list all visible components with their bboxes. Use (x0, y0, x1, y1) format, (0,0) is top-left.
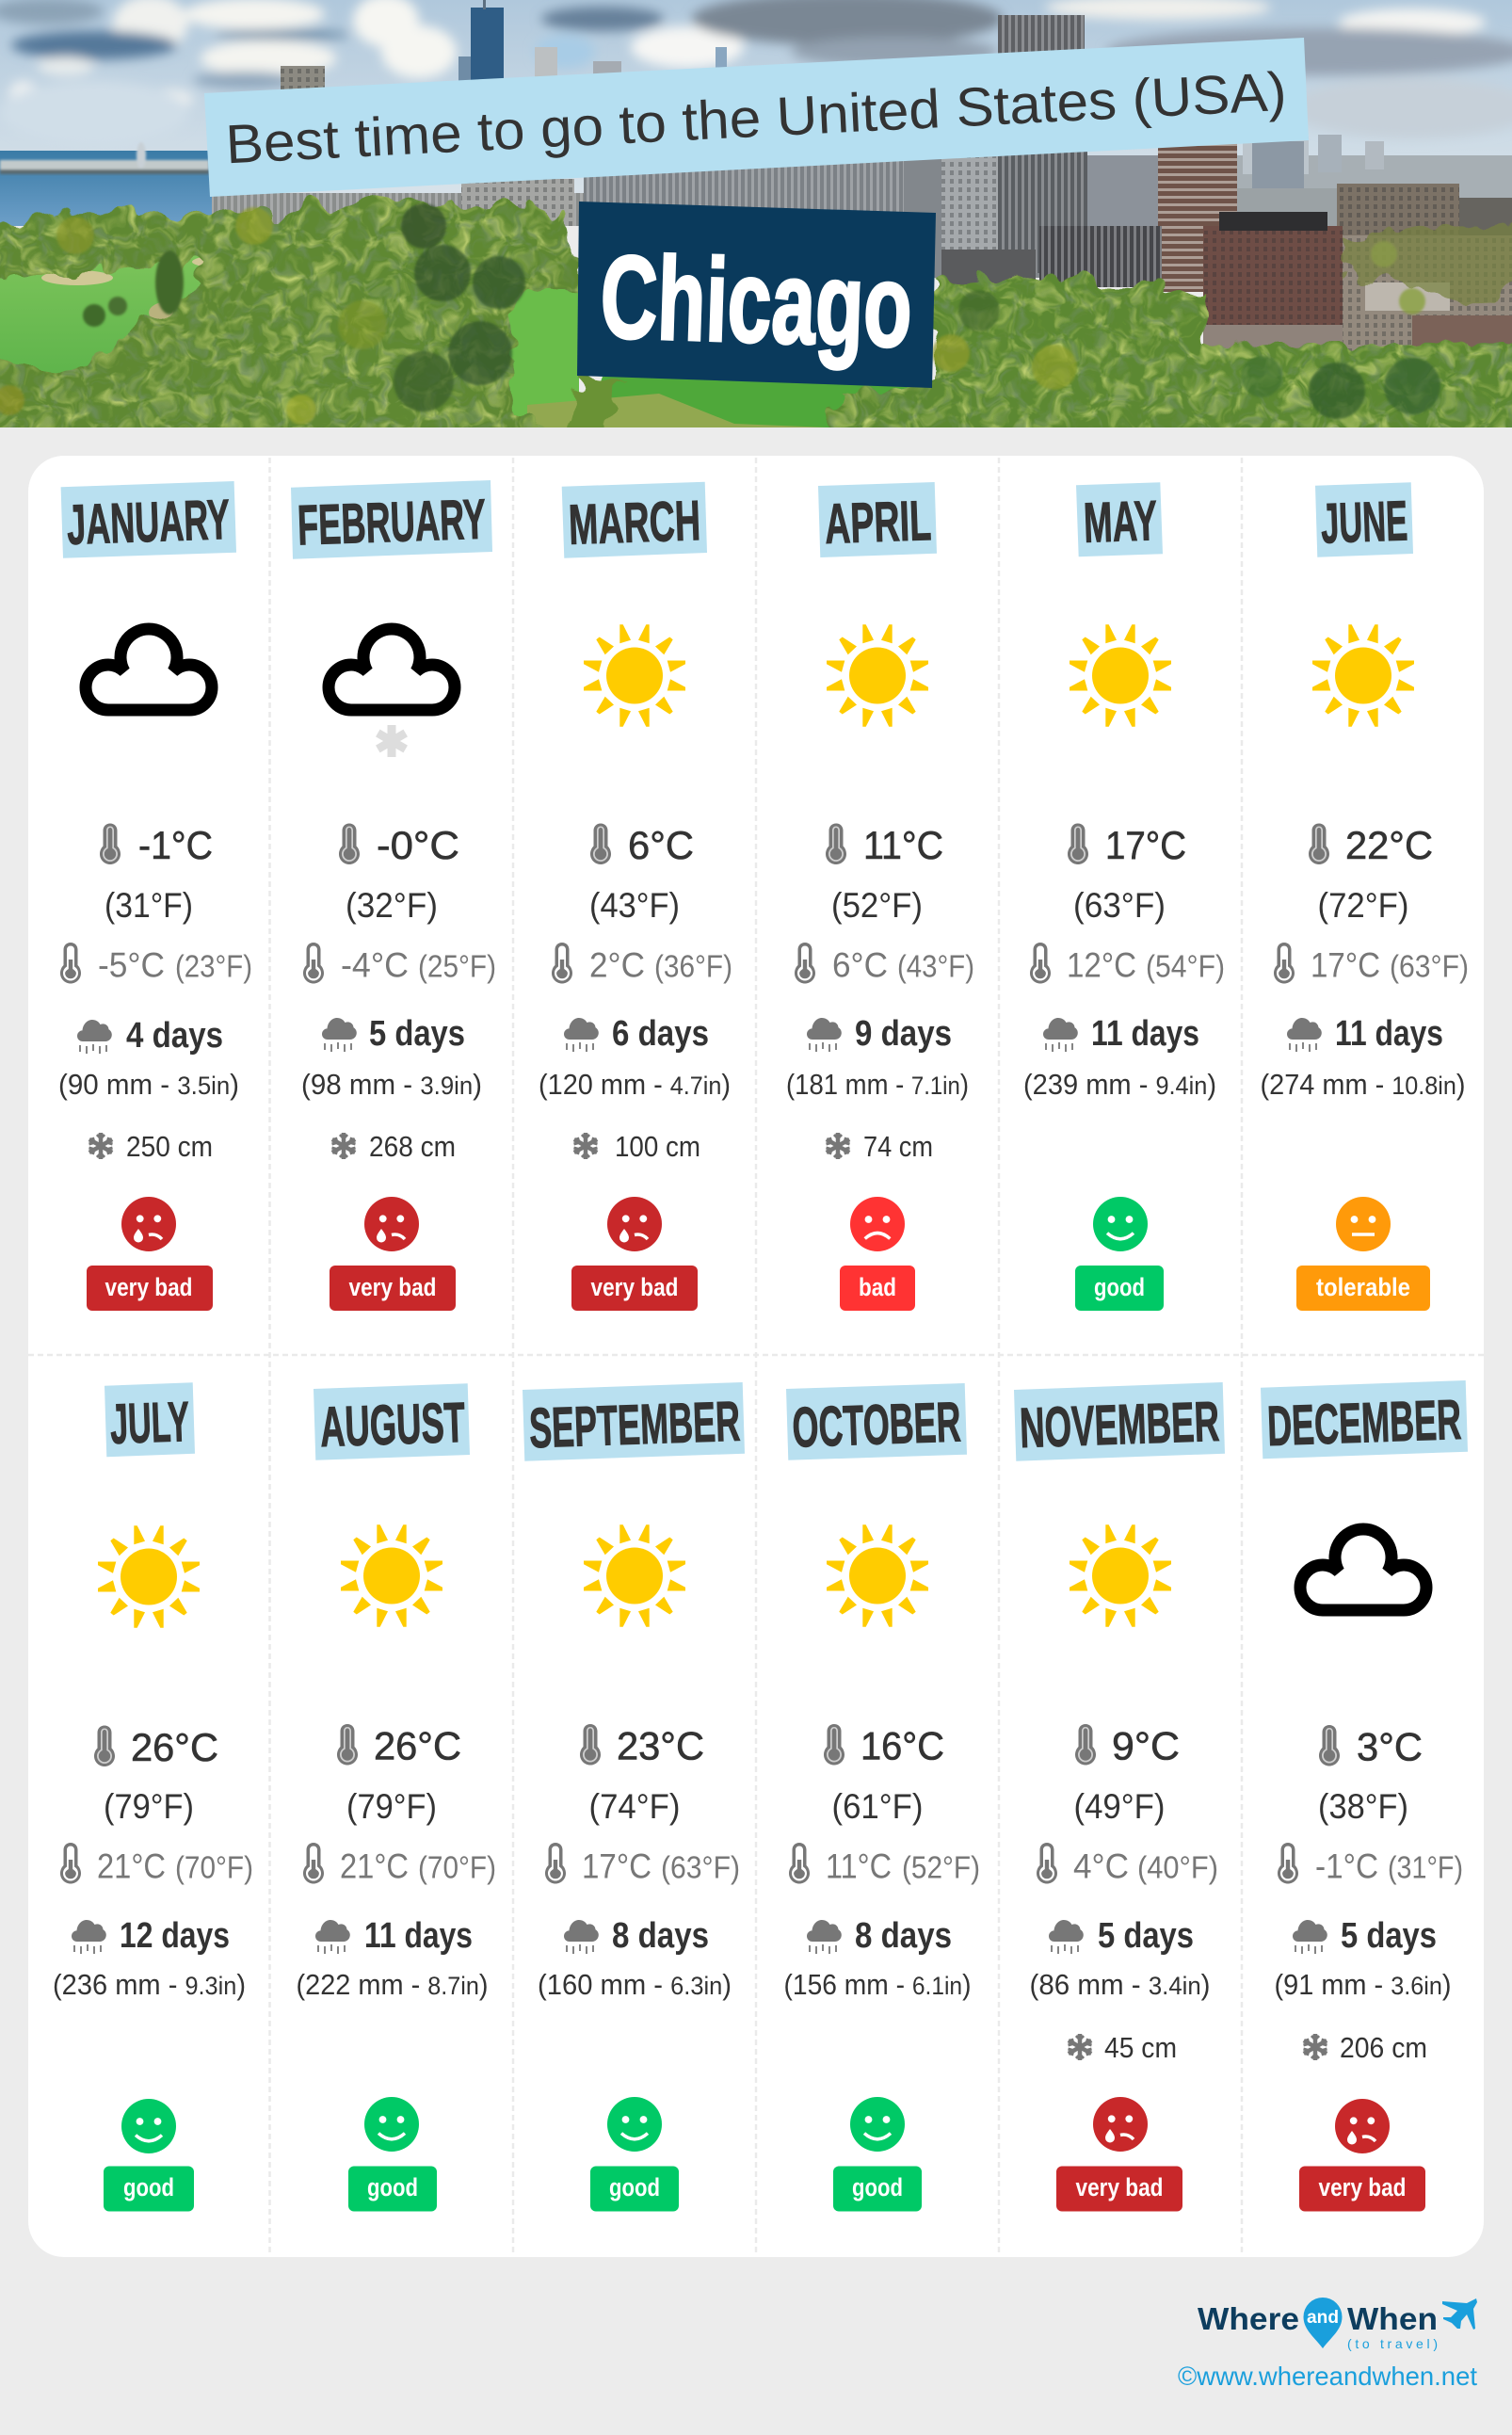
rainy days (72, 1916, 230, 1956)
high fahrenheit: (63°F) (1073, 886, 1166, 925)
rating badge (840, 1266, 915, 1311)
high temperature: -1°C (138, 823, 213, 867)
snowfall (331, 1130, 456, 1163)
month label: JULY (109, 1390, 190, 1456)
high fahrenheit: (31°F) (105, 886, 193, 925)
rating badge: bad (859, 1273, 896, 1301)
high fahrenheit: (74°F) (589, 1787, 680, 1826)
rating badge (1299, 2166, 1425, 2211)
month label (786, 1383, 967, 1460)
snowfall (827, 1130, 933, 1163)
precipitation: (120 mm - 4.7in) (539, 1068, 731, 1101)
low temperature: -1°C (1315, 1847, 1378, 1885)
tree masses (0, 198, 1512, 443)
icon: cloud with snow (329, 629, 455, 757)
precipitation: (90 mm - 3.5in) (58, 1068, 239, 1101)
rating badge: very bad (1318, 2173, 1407, 2201)
residential streets (1343, 235, 1512, 351)
rating face (364, 1197, 419, 1251)
logo: Where and When to travel (1198, 2298, 1477, 2351)
low temperature (1037, 1843, 1218, 1885)
rating face (1093, 2097, 1148, 2152)
rainy days: 11 days (1091, 1014, 1199, 1054)
month label: AUGUST (319, 1391, 466, 1459)
rainy days: 9 days (855, 1014, 952, 1054)
rainy days (1287, 1014, 1443, 1054)
icon: sun (827, 1524, 928, 1627)
low temperature (60, 1843, 253, 1885)
rating badge: tolerable (1316, 1273, 1410, 1301)
rainy days (322, 1014, 465, 1054)
brick building (1203, 226, 1343, 325)
icon: airplane (1442, 2298, 1477, 2330)
high temperature: 6°C (628, 823, 694, 867)
high fahrenheit: (32°F) (346, 886, 438, 925)
icon: sun (1070, 624, 1171, 727)
low temperature: 21°C (340, 1847, 409, 1885)
rating badge (104, 2166, 194, 2211)
month label (523, 1382, 745, 1461)
month label (562, 482, 707, 558)
low temperature (545, 1843, 740, 1885)
rainy days (1293, 1916, 1437, 1956)
rainy days (77, 1016, 223, 1056)
precipitation: (98 mm - 3.9in) (301, 1068, 482, 1101)
rating badge: very bad (591, 1273, 678, 1301)
rainy days: 6 days (612, 1014, 709, 1054)
high temperature: 16°C (861, 1723, 944, 1768)
rating badge: very bad (1075, 2173, 1164, 2201)
snowfall (1303, 2031, 1427, 2064)
icon: sun (98, 1525, 200, 1628)
icon: cloud (86, 629, 212, 710)
low temperature: 4°C (1073, 1847, 1129, 1885)
month label: SEPTEMBER (528, 1390, 741, 1459)
icon: cloud (1300, 1529, 1426, 1610)
low temperature: 12°C (1067, 945, 1136, 985)
high fahrenheit: (72°F) (1318, 886, 1408, 925)
low temperature: (63°F) (661, 1849, 740, 1885)
rating badge (330, 1266, 456, 1311)
towers above the title band (471, 8, 504, 83)
rating badge (87, 1266, 213, 1311)
panel: February (291, 480, 496, 1311)
month label (105, 1382, 195, 1457)
rating face (121, 1197, 176, 1251)
low temperature: -4°C (341, 945, 409, 985)
high temperature: 23°C (617, 1723, 704, 1768)
high temperature: 26°C (131, 1725, 218, 1769)
rating badge: good (123, 2173, 174, 2201)
low temperature: (52°F) (902, 1849, 980, 1885)
month label (1315, 482, 1413, 557)
precipitation: (86 mm - 3.4in) (1030, 1968, 1211, 2001)
month label: JUNE (1320, 489, 1408, 556)
panel: July (53, 1382, 253, 2211)
high temperature (100, 823, 213, 867)
low temperature (552, 943, 732, 985)
snowfall: 206 cm (1340, 2031, 1427, 2064)
snowfall: 100 cm (615, 1130, 700, 1163)
precipitation: (181 mm - 7.1in) (786, 1068, 969, 1101)
rating face (121, 2099, 176, 2153)
high temperature (1068, 823, 1186, 867)
rainy days: 5 days (1098, 1916, 1194, 1956)
low temperature: 17°C (1311, 945, 1380, 985)
high fahrenheit: (49°F) (1073, 1787, 1166, 1826)
website credit: ©www.whereandwhen.net (1178, 2362, 1477, 2391)
low temperature (1278, 1843, 1463, 1885)
low temperature (1030, 943, 1225, 985)
panel: June (1260, 482, 1469, 1311)
rating badge (348, 2166, 437, 2211)
rainy days (564, 1916, 709, 1956)
rating face (364, 2097, 419, 2152)
panel: April (786, 482, 974, 1311)
low temperature (303, 943, 496, 985)
high temperature: -0°C (377, 823, 459, 867)
panel: November (1014, 1382, 1225, 2211)
rainy days (1043, 1014, 1199, 1054)
title band: Best time to go to the United States (USA) (224, 61, 1288, 175)
month label (818, 482, 937, 557)
rainy days: 12 days (120, 1916, 230, 1956)
month label: OCTOBER (791, 1390, 962, 1459)
lake (0, 151, 226, 226)
panel: September (523, 1382, 745, 2211)
low temperature (60, 943, 252, 985)
rating badge: very bad (348, 1273, 437, 1301)
rainy days: 5 days (1341, 1916, 1437, 1956)
month label (291, 480, 492, 559)
logo: Where and When to travel: and (1307, 2308, 1339, 2328)
rainy days: 8 days (855, 1916, 952, 1956)
low temperature (789, 1843, 980, 1885)
rating face (607, 2097, 662, 2152)
low temperature: (40°F) (1137, 1849, 1218, 1885)
city name block: Chicago (599, 232, 914, 372)
low temperature: (36°F) (654, 949, 732, 983)
month label (1014, 1382, 1225, 1461)
precipitation: (274 mm - 10.8in) (1260, 1068, 1465, 1101)
mid-ground towers (212, 193, 588, 226)
logo: Where and When to travel: Where (1198, 2301, 1299, 2336)
rating badge: very bad (105, 1273, 192, 1301)
month label: MARCH (568, 489, 701, 556)
low temperature (795, 943, 974, 985)
rainy days: 8 days (612, 1916, 709, 1956)
low temperature: 17°C (582, 1847, 651, 1885)
panel: May (1023, 482, 1225, 1311)
high temperature: 17°C (1105, 823, 1186, 867)
precipitation: (91 mm - 3.6in) (1275, 1968, 1452, 2001)
rainy days (315, 1916, 473, 1956)
month label (1076, 482, 1163, 556)
high temperature (339, 823, 459, 867)
rainy days (807, 1916, 952, 1956)
low temperature: (23°F) (175, 949, 252, 983)
rainy days (807, 1014, 952, 1054)
rating badge: good (852, 2173, 903, 2201)
low temperature (1274, 943, 1469, 985)
rating face (850, 1197, 905, 1251)
month label: FEBRUARY (297, 488, 487, 556)
icon: sun (341, 1524, 442, 1627)
rating badge: good (1094, 1273, 1145, 1301)
calendar panel (28, 456, 1484, 2257)
rating badge (571, 1266, 698, 1311)
low temperature: 21°C (97, 1847, 166, 1885)
rating face (607, 1197, 662, 1251)
high fahrenheit: (79°F) (104, 1787, 194, 1826)
high temperature: 26°C (374, 1723, 461, 1768)
title band (204, 38, 1309, 197)
city name block (577, 202, 936, 388)
precipitation: (222 mm - 8.7in) (296, 1968, 488, 2001)
icon: sun (584, 624, 685, 727)
low temperature: 6°C (832, 945, 888, 985)
precipitation: (160 mm - 6.3in) (538, 1968, 732, 2001)
rainy days: 11 days (1335, 1014, 1443, 1054)
snowfall: 250 cm (126, 1130, 213, 1163)
low temperature: (63°F) (1390, 949, 1469, 983)
rating badge (1296, 1266, 1430, 1311)
low temperature (303, 1843, 496, 1885)
month label: MAY (1083, 489, 1158, 555)
high temperature (826, 823, 943, 867)
month label (61, 481, 236, 558)
panel: March (539, 482, 732, 1311)
icon: sun (584, 1524, 685, 1627)
low temperature: (25°F) (418, 949, 496, 983)
high fahrenheit: (61°F) (832, 1787, 923, 1826)
panel: October (783, 1383, 980, 2211)
icon: map pin (1303, 2298, 1343, 2348)
rating face (850, 2097, 905, 2152)
month label: JANUARY (66, 488, 231, 556)
high temperature: 22°C (1345, 823, 1433, 867)
high fahrenheit: (79°F) (346, 1787, 437, 1826)
precipitation: (156 mm - 6.1in) (783, 1968, 972, 2001)
rating badge: good (367, 2173, 418, 2201)
snowfall (88, 1130, 213, 1163)
high temperature (1319, 1725, 1423, 1768)
rating badge (590, 2166, 679, 2211)
snowfall: 268 cm (369, 1130, 456, 1163)
rating face (1093, 1197, 1148, 1251)
precipitation: (239 mm - 9.4in) (1023, 1068, 1216, 1101)
rainy days: 5 days (369, 1014, 465, 1054)
low temperature: (31°F) (1388, 1849, 1463, 1885)
panel: December (1261, 1380, 1468, 2211)
low temperature: (70°F) (175, 1849, 253, 1885)
rainy days: 4 days (126, 1016, 223, 1056)
high temperature: 11°C (863, 823, 943, 867)
rating badge (833, 2166, 922, 2211)
high temperature: 9°C (1112, 1723, 1180, 1768)
high fahrenheit: (43°F) (589, 886, 680, 925)
snowfall: 74 cm (863, 1130, 933, 1163)
tree canopy accents (0, 203, 1440, 425)
icon: sun (1312, 624, 1414, 727)
rating badge (1056, 2166, 1182, 2211)
month label: APRIL (824, 489, 932, 556)
low temperature: -5°C (98, 945, 165, 985)
snowfall: 45 cm (1104, 2031, 1177, 2064)
rainy days (564, 1014, 709, 1054)
logo: Where and When to travel: When (1347, 2301, 1438, 2336)
high fahrenheit: (38°F) (1318, 1787, 1408, 1826)
low temperature: (43°F) (897, 949, 974, 983)
high temperature (590, 823, 694, 867)
logo: Where and When to travel: (to travel) (1347, 2336, 1438, 2351)
month label: NOVEMBER (1019, 1390, 1220, 1459)
rainy days (1049, 1916, 1194, 1956)
low temperature: (54°F) (1146, 949, 1225, 983)
low temperature: (70°F) (418, 1849, 496, 1885)
rating badge (1075, 1266, 1164, 1311)
header photo: Chicago skyline and park (0, 0, 1512, 443)
high fahrenheit: (52°F) (831, 886, 923, 925)
high temperature (824, 1723, 944, 1768)
rainy days: 11 days (364, 1916, 473, 1956)
high temperature: 3°C (1357, 1725, 1423, 1768)
panel: August (296, 1383, 496, 2211)
snowfall (1068, 2031, 1177, 2064)
panel: January (58, 481, 252, 1311)
lawns (0, 255, 201, 373)
distant buildings (1237, 155, 1512, 198)
snowfall (574, 1130, 700, 1163)
rating face (1336, 1197, 1391, 1251)
rating badge: good (609, 2173, 660, 2201)
precipitation: (236 mm - 9.3in) (53, 1968, 246, 2001)
icon: sun (827, 624, 928, 727)
high temperature (1075, 1723, 1180, 1768)
low temperature: 11°C (826, 1847, 892, 1885)
month label (314, 1383, 470, 1460)
rating face (1335, 2099, 1390, 2153)
low temperature: 2°C (589, 945, 645, 985)
icon: sun (1070, 1524, 1171, 1627)
